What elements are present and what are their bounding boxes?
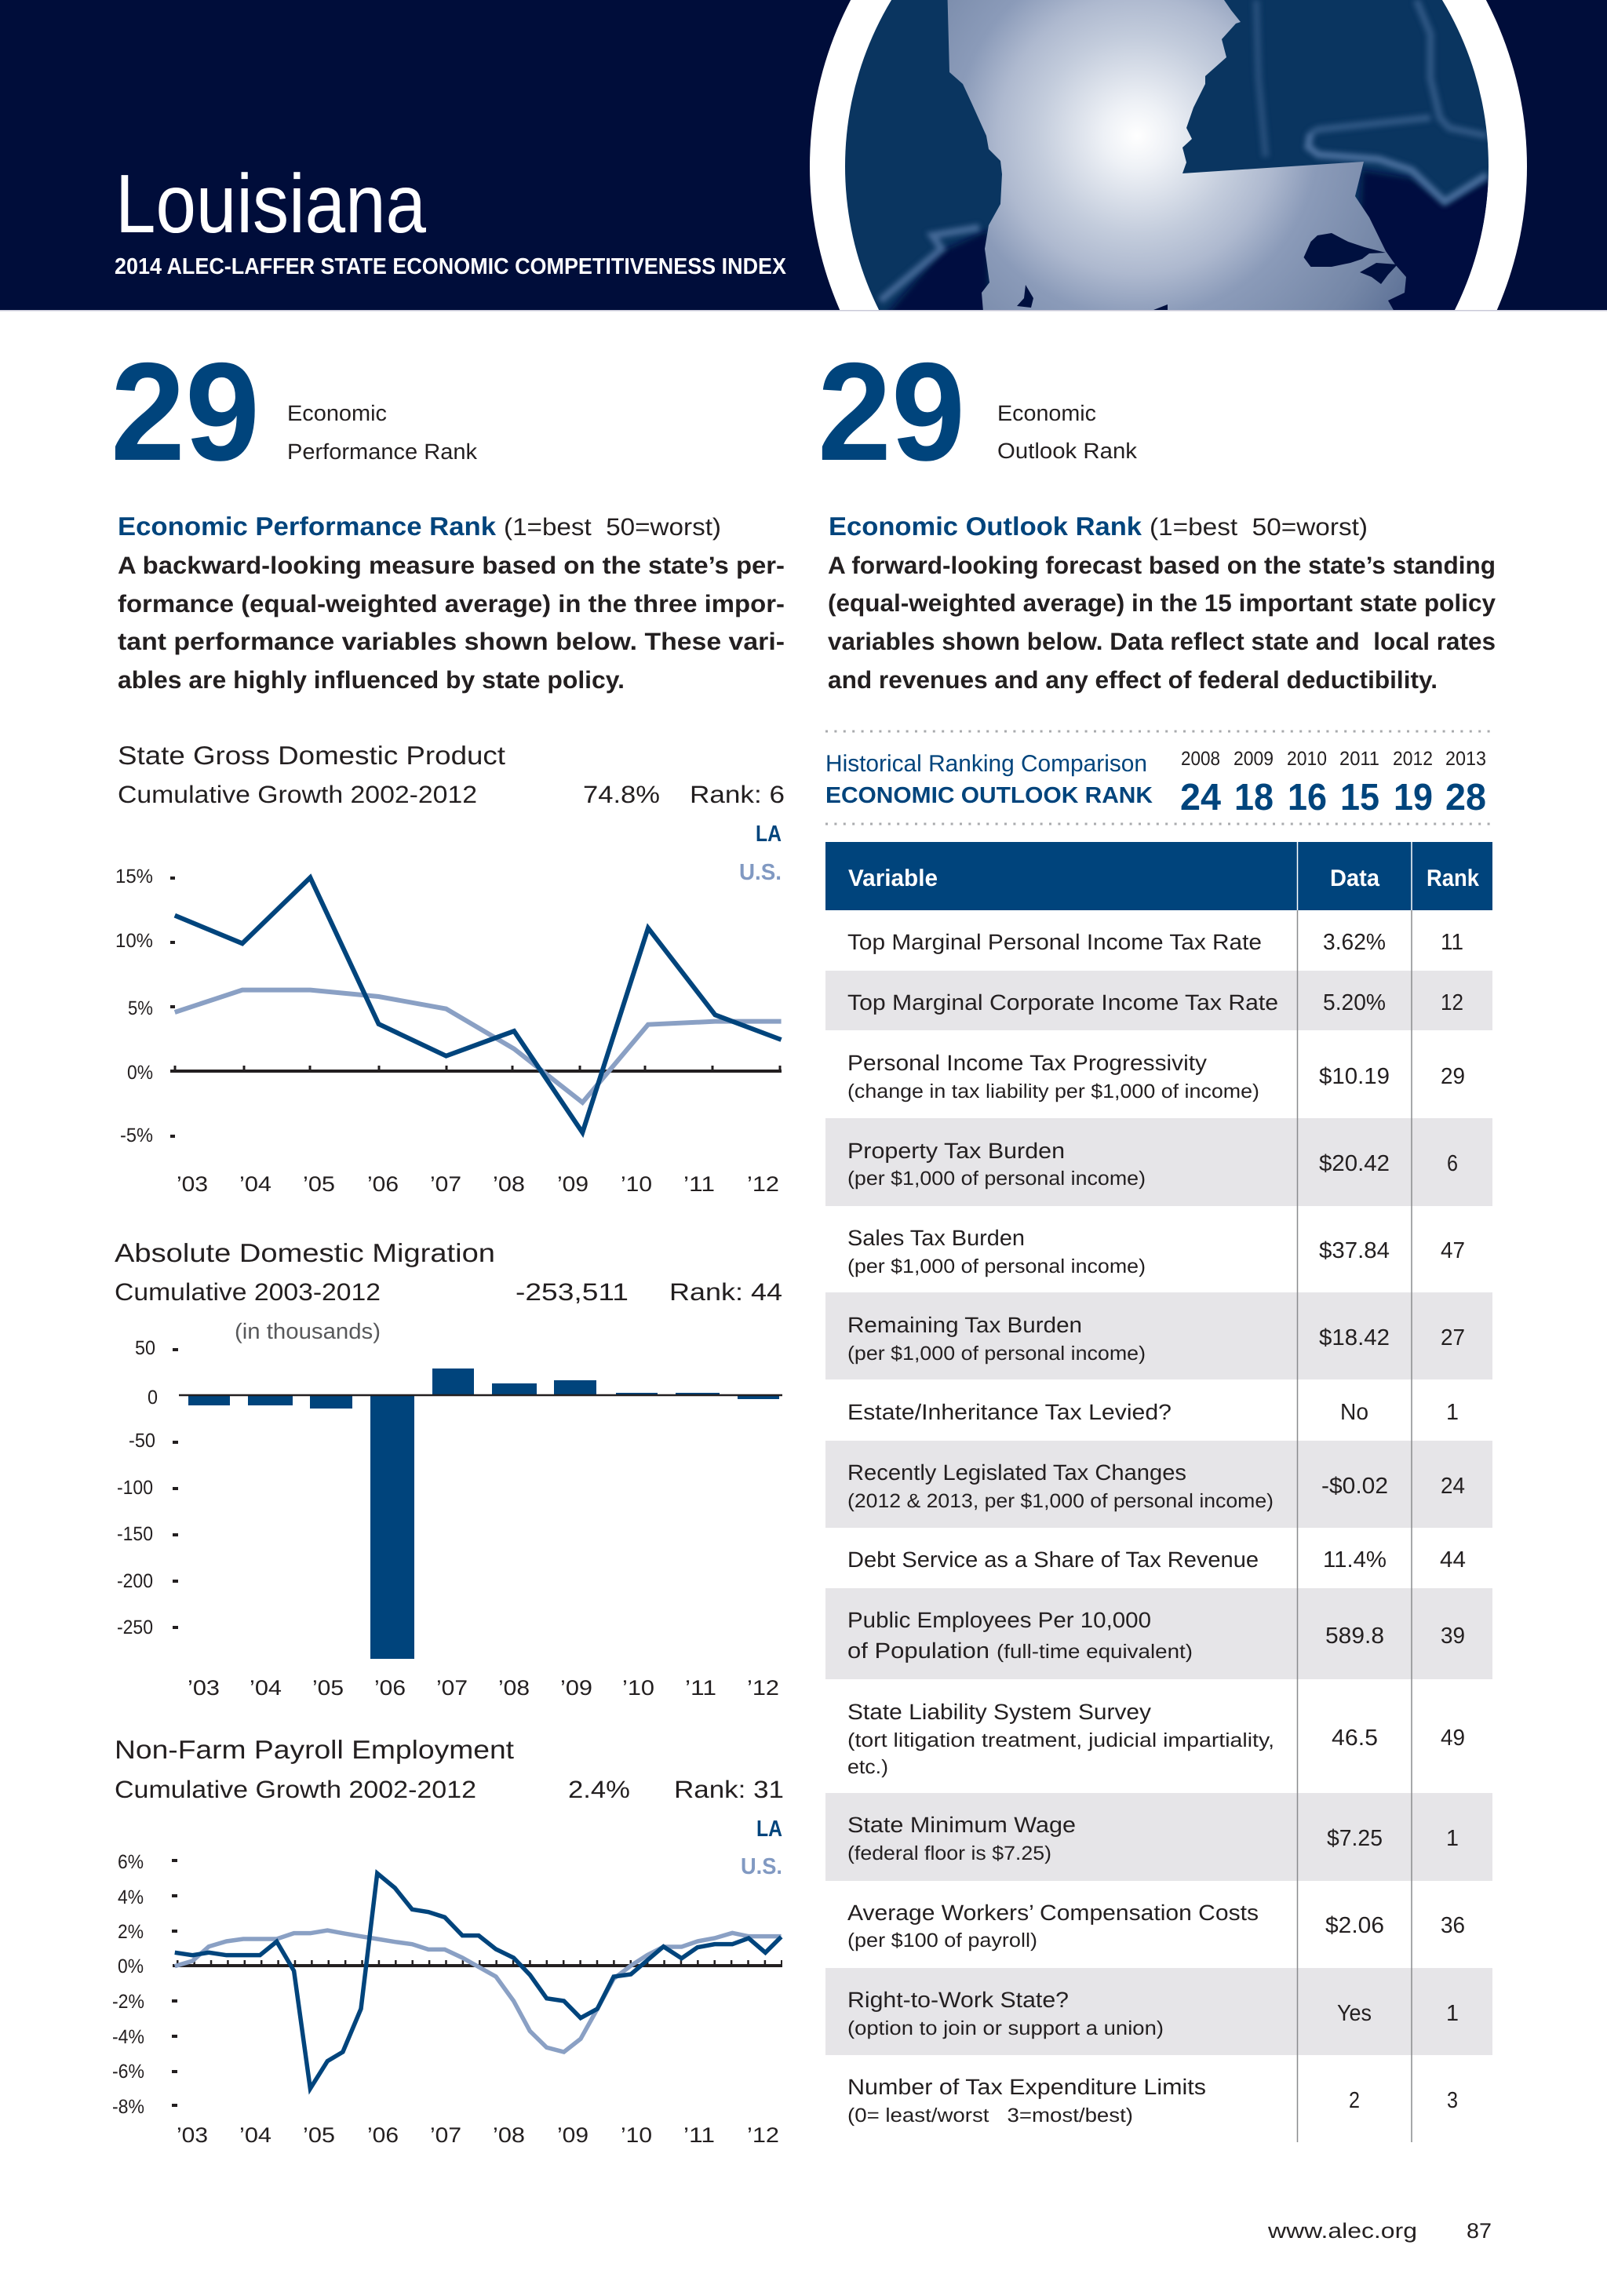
row: debt service: 44 — [1440, 1547, 1466, 1573]
rank label — [287, 401, 478, 464]
table header: Rank — [1427, 866, 1479, 891]
panel: economic outlook rank — [818, 333, 1496, 694]
row: remaining tax burden: $18.42 — [1319, 1325, 1390, 1350]
row: top marginal personal income tax rate — [847, 930, 1463, 955]
chart heading: Rank: 44 — [669, 1278, 782, 1306]
row: state minimum wage — [847, 1813, 1459, 1864]
row: estate/inheritance tax: 1 — [1446, 1400, 1459, 1425]
legend — [739, 822, 782, 885]
row: personal income tax progressivity: $10.19 — [1319, 1064, 1390, 1089]
row: debt service: 11.4% — [1323, 1547, 1387, 1573]
outlook description: variables shown below. Data reflect state and local rates — [828, 628, 1496, 655]
outlook description: A forward-looking forecast based on the state’s standing — [828, 552, 1496, 579]
bar chart: migration: 0 — [148, 1387, 158, 1409]
table header — [825, 842, 1492, 910]
row: recently legislated tax changes: (2012 & 2013, per $1,000 of personal income) — [847, 1490, 1274, 1512]
line chart: GDP growth: 15% — [115, 866, 153, 887]
bar chart: migration: ’07 — [436, 1676, 468, 1700]
row: right-to-work state: 1 — [1446, 2001, 1459, 2026]
row: debt service: Debt Service as a Share of Tax Revenue — [847, 1547, 1259, 1572]
line chart: payroll growth: 2% — [118, 1921, 144, 1943]
line chart: payroll growth: -4% — [112, 2026, 144, 2048]
line chart: payroll growth: ’06 — [367, 2123, 399, 2147]
row: state liability system survey: State Liability System Survey — [847, 1700, 1151, 1724]
rank label: Economic — [287, 401, 387, 425]
chart heading: -253,511 — [516, 1278, 629, 1306]
outlook description: and revenues and any effect of federal deductibility. — [828, 666, 1438, 694]
row: state liability system survey: 49 — [1441, 1726, 1465, 1751]
row: top marginal corporate income tax rate: 12 — [1441, 990, 1463, 1015]
footer: 87 — [1467, 2219, 1492, 2243]
row: property tax burden: Property Tax Burden — [847, 1139, 1065, 1163]
row: top marginal personal income tax rate: 3.62% — [1323, 930, 1386, 955]
row: tax expenditure limits: Number of Tax Expenditure Limits — [847, 2075, 1206, 2099]
legend: U.S. — [739, 860, 782, 885]
bar chart: migration — [117, 1337, 782, 1700]
row: public employees: 39 — [1441, 1624, 1465, 1649]
bar chart: migration: ’03 — [188, 1676, 220, 1700]
row: tax expenditure limits — [847, 2075, 1458, 2127]
row: public employees — [847, 1608, 1465, 1663]
row: workers' compensation: 36 — [1441, 1913, 1465, 1938]
footer: www.alec.org — [1267, 2219, 1417, 2243]
chart heading: Cumulative 2003-2012 — [115, 1278, 381, 1306]
line chart: payroll growth: ’04 — [239, 2123, 271, 2147]
chart heading: Rank: 31 — [674, 1776, 784, 1803]
row: state liability system survey: (tort litigation treatment, judicial impartiality, — [847, 1729, 1274, 1751]
header banner — [0, 0, 1607, 311]
bar chart: migration: -50 — [129, 1430, 155, 1452]
panel: absolute domestic migration — [115, 1238, 782, 1700]
row: remaining tax burden: Remaining Tax Burden — [847, 1313, 1082, 1337]
historical ranks: 19 — [1394, 777, 1433, 818]
row: top marginal personal income tax rate: Top Marginal Personal Income Tax Rate — [847, 930, 1262, 954]
outlook description: (equal-weighted average) in the 15 important state policy — [828, 589, 1496, 617]
row: remaining tax burden: 27 — [1441, 1325, 1465, 1350]
line chart: payroll growth — [112, 1851, 782, 2147]
historical ranks: 24 — [1180, 777, 1221, 818]
chart heading: Rank: 6 — [690, 781, 785, 808]
row: recently legislated tax changes: 24 — [1441, 1474, 1465, 1499]
line chart: GDP growth: 10% — [115, 930, 153, 952]
line chart: GDP growth: ’11 — [683, 1172, 715, 1196]
row: estate/inheritance tax: No — [1340, 1400, 1368, 1425]
line chart: payroll growth: ’07 — [430, 2123, 461, 2147]
row: property tax burden — [847, 1139, 1458, 1190]
row: recently legislated tax changes: Recently Legislated Tax Changes — [847, 1460, 1186, 1485]
panel: policy variables table — [825, 842, 1492, 2142]
row: property tax burden: (per $1,000 of personal income) — [847, 1168, 1146, 1190]
historical ranks — [1180, 777, 1486, 818]
panel: economic performance rank — [111, 333, 785, 694]
legend: LA — [756, 822, 782, 847]
historical ranks: 18 — [1234, 777, 1274, 818]
row: sales tax burden: $37.84 — [1319, 1238, 1390, 1263]
legend — [741, 1817, 782, 1879]
line chart: payroll growth: 6% — [118, 1851, 144, 1873]
bar chart: migration: -150 — [117, 1523, 153, 1545]
line chart: GDP growth: ’09 — [557, 1172, 589, 1196]
bar chart: migration: ’10 — [622, 1676, 654, 1700]
years: 2013 — [1445, 748, 1486, 770]
row: workers' compensation — [847, 1901, 1465, 1952]
line chart: payroll growth: -6% — [112, 2061, 144, 2083]
panel: historical ranking comparison — [825, 731, 1492, 824]
row: tax expenditure limits: 3 — [1447, 2088, 1458, 2113]
row: public employees: of Population — [847, 1638, 989, 1663]
row: public employees: 589.8 — [1325, 1624, 1384, 1649]
performance heading — [118, 512, 721, 541]
comparison label: ECONOMIC OUTLOOK RANK — [825, 783, 1153, 808]
big rank number: 29 — [111, 333, 260, 490]
row: public employees: (full-time equivalent) — [997, 1641, 1193, 1663]
bar chart: migration: -250 — [117, 1616, 153, 1638]
row: right-to-work state: Yes — [1337, 2001, 1372, 2026]
row: recently legislated tax changes — [847, 1460, 1465, 1512]
chart heading: Cumulative Growth 2002-2012 — [115, 1776, 476, 1803]
row: sales tax burden: Sales Tax Burden — [847, 1226, 1025, 1250]
line chart: payroll growth: ’12 — [747, 2123, 779, 2147]
line chart: GDP growth — [115, 866, 782, 1196]
line chart: GDP growth: ’08 — [493, 1172, 525, 1196]
bar chart: migration: 50 — [135, 1337, 155, 1359]
line chart: GDP growth: ’07 — [430, 1172, 461, 1196]
row: personal income tax progressivity: Personal Income Tax Progressivity — [847, 1051, 1207, 1075]
table header: Variable — [848, 866, 938, 891]
row: property tax burden: $20.42 — [1319, 1151, 1390, 1176]
chart heading — [115, 1735, 784, 1803]
row: sales tax burden: 47 — [1441, 1238, 1465, 1263]
bar chart: migration: ’12 — [747, 1676, 779, 1700]
title: Louisiana — [115, 158, 426, 250]
bar chart: migration: ’09 — [560, 1676, 592, 1700]
row: state minimum wage: $7.25 — [1327, 1826, 1383, 1851]
bar chart: migration: ’06 — [374, 1676, 406, 1700]
chart heading: Non-Farm Payroll Employment — [115, 1735, 514, 1764]
performance description: A backward-looking measure based on the state’s per- — [118, 552, 785, 579]
line chart: GDP growth: -5% — [120, 1124, 153, 1146]
years — [1181, 748, 1486, 770]
line chart: GDP growth: 5% — [128, 997, 153, 1019]
comparison label: Historical Ranking Comparison — [825, 751, 1147, 777]
bar chart: migration: -200 — [117, 1570, 153, 1592]
chart heading: 2.4% — [568, 1776, 630, 1803]
row: state minimum wage: State Minimum Wage — [847, 1813, 1076, 1837]
subtitle: 2014 ALEC-LAFFER STATE ECONOMIC COMPETITIVENESS INDEX — [115, 254, 787, 279]
unit note: (in thousands) — [235, 1319, 381, 1343]
line chart: GDP growth: ’03 — [177, 1172, 208, 1196]
line chart: payroll growth: ’09 — [557, 2123, 589, 2147]
years: 2008 — [1181, 748, 1220, 770]
line chart: payroll growth: ’08 — [493, 2123, 525, 2147]
row: remaining tax burden: (per $1,000 of personal income) — [847, 1343, 1146, 1365]
bar chart: migration: ’11 — [685, 1676, 716, 1700]
row: estate/inheritance tax: Estate/Inheritance Tax Levied? — [847, 1400, 1172, 1424]
chart heading: Cumulative Growth 2002-2012 — [118, 781, 477, 808]
row: state minimum wage: (federal floor is $7.25) — [847, 1842, 1051, 1864]
performance description — [118, 552, 785, 694]
rank label — [997, 401, 1138, 463]
bar chart: migration: ’05 — [312, 1676, 344, 1700]
line chart: payroll growth: ’05 — [303, 2123, 335, 2147]
row: state liability system survey: 46.5 — [1332, 1726, 1378, 1751]
row: estate/inheritance tax — [847, 1400, 1459, 1425]
rank label: Economic — [997, 401, 1096, 425]
legend: U.S. — [741, 1854, 782, 1879]
row: debt service — [847, 1547, 1466, 1573]
row: sales tax burden: (per $1,000 of personal income) — [847, 1256, 1146, 1277]
rank label: Performance Rank — [287, 439, 478, 464]
chart heading — [118, 741, 785, 808]
line chart: payroll growth: ’10 — [621, 2123, 652, 2147]
performance description: tant performance variables shown below. These vari- — [118, 628, 785, 655]
row: right-to-work state: Right-to-Work State? — [847, 1988, 1069, 2012]
bar chart: migration: -100 — [117, 1477, 153, 1499]
line chart: GDP growth: ’12 — [747, 1172, 779, 1196]
row: state liability system survey — [847, 1700, 1465, 1778]
bar chart: migration: ’08 — [498, 1676, 530, 1700]
row: personal income tax progressivity: 29 — [1441, 1064, 1465, 1089]
outlook description — [828, 552, 1496, 694]
years: 2010 — [1287, 748, 1327, 770]
historical ranks: 28 — [1445, 777, 1486, 818]
legend: LA — [756, 1817, 782, 1842]
rank label: Outlook Rank — [997, 439, 1138, 463]
chart heading: State Gross Domestic Product — [118, 741, 505, 770]
row: top marginal corporate income tax rate — [847, 990, 1463, 1015]
row: personal income tax progressivity: (change in tax liability per $1,000 of income) — [847, 1081, 1259, 1102]
years: 2009 — [1233, 748, 1274, 770]
line chart: GDP growth: ’10 — [621, 1172, 652, 1196]
row: workers' compensation: Average Workers’ Compensation Costs — [847, 1901, 1259, 1925]
years: 2011 — [1339, 748, 1379, 770]
years: 2012 — [1393, 748, 1433, 770]
table header: Data — [1330, 866, 1379, 891]
line chart: payroll growth: -2% — [112, 1991, 144, 2013]
row: right-to-work state: (option to join or support a union) — [847, 2017, 1164, 2039]
row: personal income tax progressivity — [847, 1051, 1465, 1102]
performance description: formance (equal-weighted average) in the three impor- — [118, 590, 785, 618]
outlook heading: Economic Outlook Rank — [829, 512, 1142, 541]
row: workers' compensation: (per $100 of payroll) — [847, 1930, 1037, 1952]
line chart: GDP growth: ’06 — [367, 1172, 399, 1196]
panel: non-farm payroll employment — [112, 1735, 784, 2147]
row: state liability system survey: etc.) — [847, 1756, 888, 1778]
row: public employees: Public Employees Per 10,000 — [847, 1608, 1151, 1632]
footer — [1267, 2219, 1492, 2243]
row: property tax burden: 6 — [1447, 1151, 1458, 1176]
row: right-to-work state — [847, 1988, 1459, 2039]
performance description: ables are highly influenced by state policy. — [118, 666, 625, 694]
historical ranks: 16 — [1288, 777, 1327, 818]
line chart: payroll growth: ’03 — [177, 2123, 208, 2147]
performance heading: (1=best 50=worst) — [504, 513, 721, 541]
line chart: GDP growth: 0% — [127, 1062, 153, 1084]
row: remaining tax burden — [847, 1313, 1465, 1365]
line chart: payroll growth: 4% — [118, 1886, 144, 1908]
chart heading — [115, 1238, 782, 1306]
row: workers' compensation: $2.06 — [1325, 1913, 1384, 1938]
outlook heading — [829, 512, 1368, 541]
line chart: payroll growth: -8% — [112, 2096, 144, 2118]
line chart: payroll growth: ’11 — [683, 2123, 715, 2147]
comparison label — [825, 751, 1153, 808]
row: top marginal corporate income tax rate: Top Marginal Corporate Income Tax Rate — [847, 990, 1278, 1015]
bar chart: migration: ’04 — [250, 1676, 282, 1700]
row: tax expenditure limits: (0= least/worst 3=most/best) — [847, 2105, 1133, 2127]
row: recently legislated tax changes: -$0.02 — [1321, 1474, 1388, 1499]
big rank number: 29 — [818, 333, 965, 490]
historical ranks: 15 — [1340, 777, 1379, 818]
row: sales tax burden — [847, 1226, 1465, 1277]
line chart: GDP growth: ’04 — [239, 1172, 271, 1196]
outlook heading: (1=best 50=worst) — [1150, 513, 1368, 541]
row: top marginal personal income tax rate: 11 — [1441, 930, 1463, 955]
row: top marginal corporate income tax rate: 5.20% — [1323, 990, 1386, 1015]
line chart: payroll growth: 0% — [118, 1955, 144, 1977]
row: state minimum wage: 1 — [1446, 1826, 1459, 1851]
state map medallion — [810, 0, 1530, 525]
performance heading: Economic Performance Rank — [118, 512, 497, 541]
row: tax expenditure limits: 2 — [1349, 2088, 1360, 2113]
chart heading: Absolute Domestic Migration — [115, 1238, 495, 1267]
panel: state gross domestic product — [115, 741, 785, 1196]
chart heading: 74.8% — [583, 781, 660, 808]
line chart: GDP growth: ’05 — [303, 1172, 335, 1196]
